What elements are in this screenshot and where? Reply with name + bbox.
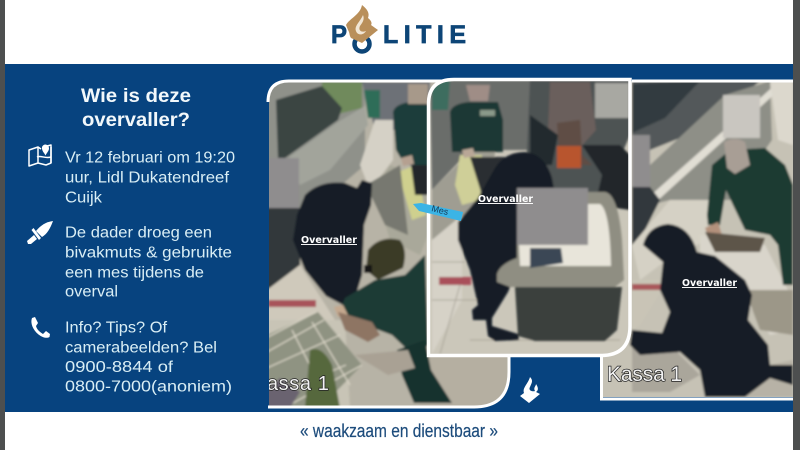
logo letter P: P [331,21,347,49]
hooded robber body [293,180,372,306]
hooded robber [630,224,793,397]
text block: description: overval [65,284,118,301]
text block: contact [65,320,232,396]
logo flame highlights [356,15,366,34]
man in green shirt [393,102,430,165]
heading [81,86,191,131]
arrow line [413,203,463,221]
text block: contact: 0900-8844 of [65,359,174,376]
heading: overvaller? [82,110,190,131]
logo ring O [354,36,370,52]
checkout counter [497,192,624,287]
text block: date and place [65,150,235,206]
grey privacy block [285,158,300,182]
photo 3 scene [600,80,795,400]
panel: text column [27,86,235,396]
panel: photo 3 [600,80,795,400]
logo: POLITIE [331,5,466,52]
text block: contact: Info? Tips? Of [65,320,168,337]
icon: map with pin [29,145,51,166]
icon: phone [31,317,50,338]
icon: police emblem [520,377,540,403]
panel: photo 2 [428,78,632,358]
logo letters LITIE: LITIE [383,21,466,49]
left page edge [0,0,5,450]
photo 3 frame [602,81,793,399]
label: Overvaller: Overvaller [301,235,357,246]
slogan: « waakzaam en dienstbaar » [300,420,498,441]
robber with hood [458,152,556,341]
right page edge [793,0,800,450]
blue band [5,64,793,412]
label: Overvaller: Overvaller [682,278,737,289]
text block: description: bivakmuts & gebruikte [65,244,232,261]
heading: Wie is deze [81,86,191,107]
text block: date and place: Vr 12 februari om 19:20 [65,150,235,167]
text block: contact: camerabeelden? Bel [65,339,217,356]
text block: description: een mes tijdens de [65,264,204,281]
floor tile lines [432,262,620,354]
clerk in green [707,148,793,285]
man in green shirt [450,102,503,152]
photo 1 scene [253,80,512,410]
arrow label: Mes [431,203,450,217]
grey privacy block [517,188,588,245]
icon: knife [27,221,53,244]
label: Kassa 1: Kassa 1 [607,363,682,386]
photo 2 scene [428,78,632,358]
logo flame emblem [346,5,378,43]
photo 2 frame [428,80,630,356]
text block: contact: 0800-7000(anoniem) [65,379,232,396]
label: Kassa 1: Kassa 1 [253,373,329,395]
text block: date and place: uur, Lidl Dukatendreef [65,169,230,186]
woman in green coat [342,254,427,349]
text block: date and place: Cuijk [65,189,102,206]
panel: photo 1 [253,80,512,410]
photo 1 frame [268,81,509,407]
text block: description [65,225,232,301]
shopping cart [267,312,362,408]
label: Overvaller: Overvaller [478,194,533,205]
text block: description: De dader droeg een [65,225,212,242]
arrow: Mes [413,203,463,221]
